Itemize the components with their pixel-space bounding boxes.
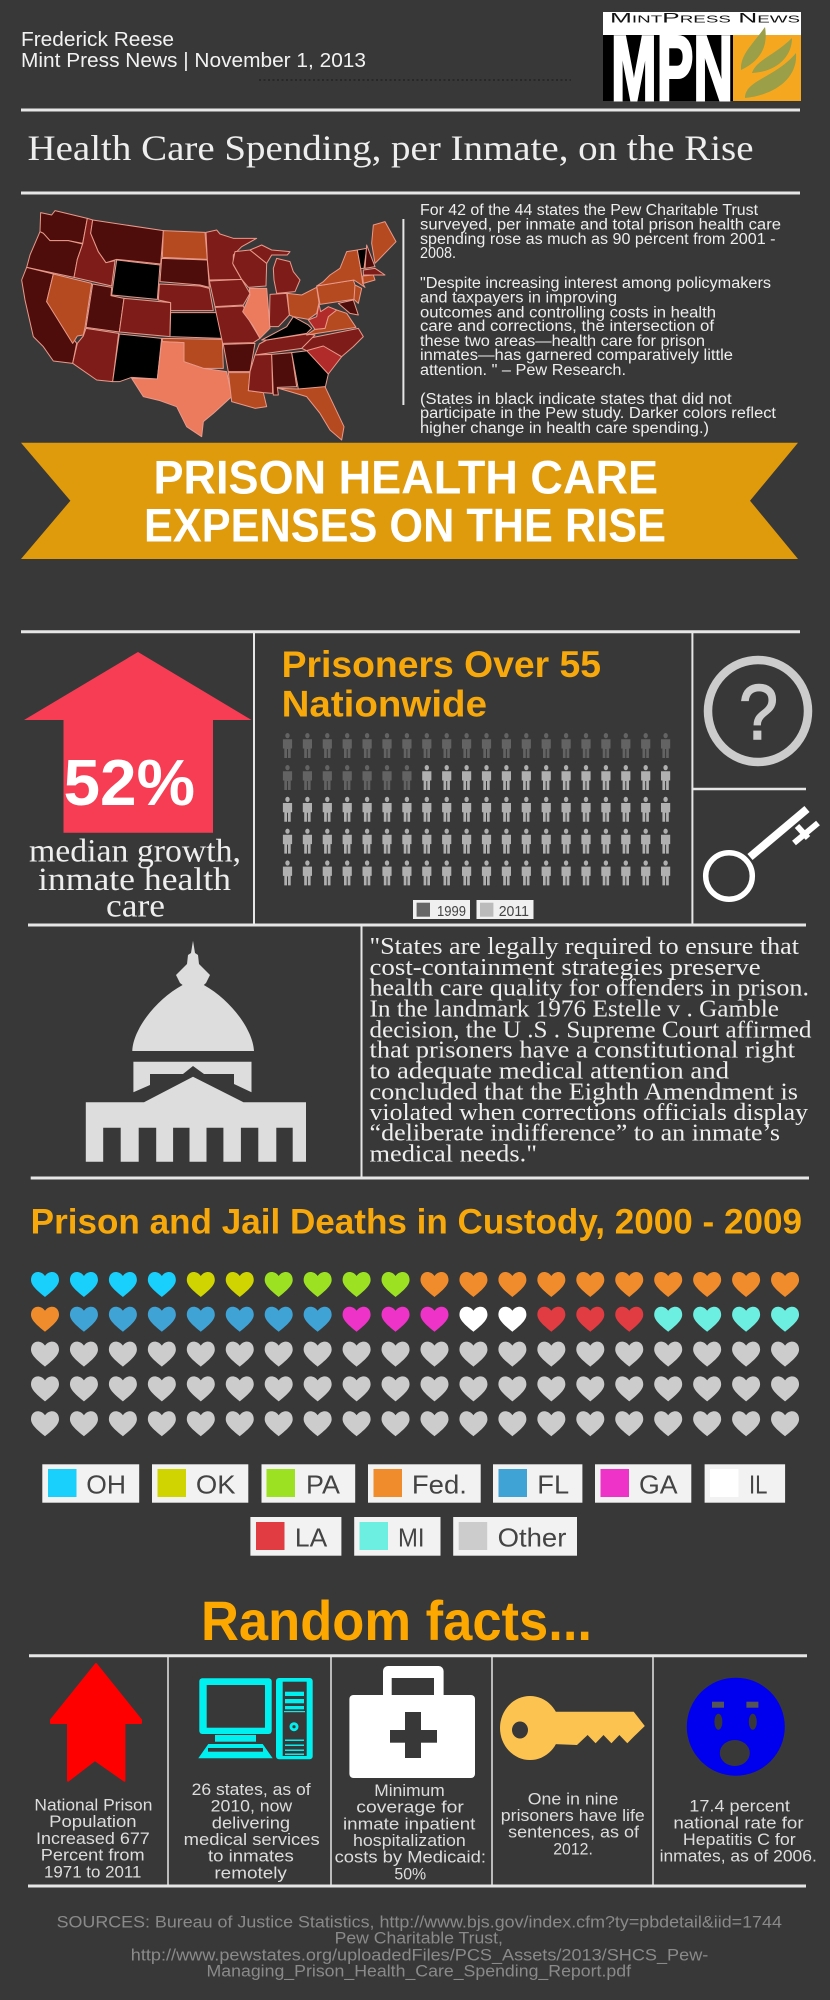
fact text: 2012. [553,1839,593,1858]
map explanation text: attention. " – Pew Research. [420,362,626,379]
panel: 52% median growth [24,652,252,925]
heading: deaths in custody: Prison and Jail Deaths in Custody, 2000 - 2009 [31,1202,802,1241]
map explanation text: care and corrections, the intersection of [420,318,715,335]
icon: blue shocked face [687,1678,785,1776]
caption: inmate health [38,862,232,898]
fact: prison population [34,1664,152,1881]
byline: Mint Press News | November 1, 2013 [21,50,366,72]
legend: states: Fed. [412,1469,467,1499]
icon: medical kit [349,1666,475,1778]
banner [21,443,798,559]
title: Health Care Spending, per Inmate, on the Rise [28,128,754,168]
fact: remote medical services [184,1678,320,1882]
map explanation text: participate in the Pew study. Darker colors reflect [420,405,777,422]
banner: PRISON HEALTH CARE [154,450,658,503]
legend: states: IL [749,1469,768,1499]
legend: states: OK [196,1469,236,1499]
fact: medicaid coverage [335,1666,486,1883]
sources [57,1913,782,1981]
quote: Estelle v. Gamble: "States are legally required to ensure that [370,933,799,960]
map explanation text: spending rose as much as 90 percent from 2001 - [420,231,776,248]
map explanation text: "Despite increasing interest among policymakers [420,275,771,292]
caption [29,834,241,925]
caption: median growth, [29,834,241,870]
map explanation text: For 42 of the 44 states the Pew Charitable Trust [420,202,759,219]
map explanation text: these two areas—health care for prison [420,333,705,350]
fact text: sentences, as of [508,1823,639,1842]
fact text [660,1797,817,1866]
legend: states: GA [639,1469,678,1499]
byline [21,29,366,72]
logo: MintPress News: MPN [611,18,733,120]
icon: gold key [500,1696,645,1760]
legend: states: LA [295,1523,328,1553]
pictogram chart: hearts [31,1272,799,1436]
legend: states: MI [398,1523,424,1553]
quote: Estelle v. Gamble: to adequate medical attention and [370,1058,729,1085]
quote: Estelle v. Gamble [370,933,812,1168]
quote: Estelle v. Gamble: medical needs." [370,1141,537,1168]
quote: Estelle v. Gamble: In the landmark 1976 Estelle v . Gamble [370,996,779,1023]
fact text: medical services [184,1830,320,1849]
legend: 1999 and 2011: 2011 [499,903,529,920]
quote: Estelle v. Gamble: concluded that the Eighth Amendment is [370,1078,798,1105]
heading: Nationwide [282,684,487,725]
caption: care [106,889,165,925]
icon: capitol building [86,941,306,1162]
legend: states [42,1464,785,1556]
fact text: delivering [212,1813,290,1832]
heading: random facts: Random facts... [201,1589,592,1652]
quote: Estelle v. Gamble: decision, the U .S . Supreme Court affirmed [370,1016,812,1043]
quote: Estelle v. Gamble: health care quality for offenders in prison. [370,975,809,1002]
fact text: inmate inpatient [343,1814,476,1833]
fact text: Population [49,1812,137,1831]
map explanation text: higher change in health care spending.) [420,420,709,437]
sources: SOURCES: Bureau of Justice Statistics, http://www.bjs.gov/index.cfm?ty=pbdetail&iid=1744 [57,1913,782,1931]
fact text: Minimum [374,1781,445,1800]
fact text: National Prison [34,1796,152,1815]
icon: red arrow [51,1664,141,1781]
map explanation text: (States in black indicate states that did not [420,391,732,408]
legend: 1999 and 2011: 1999 [437,903,466,920]
fact text [184,1780,320,1882]
legend: states: OH [86,1469,126,1499]
fact text: Percent from [41,1846,145,1865]
heading: Prisoners Over 55 [282,644,601,685]
legend: states: PA [306,1469,341,1499]
map explanation text: and taxpayers in improving [420,290,617,307]
sources: http://www.pewstates.org/uploadedFiles/PCS_Assets/2013/SHCS_Pew- [131,1947,708,1965]
fact text [34,1796,152,1881]
icon: computer [198,1678,313,1759]
heading [282,644,601,725]
icon: question mark circle [708,660,808,762]
map explanation text: outcomes and controlling costs in health [420,304,716,321]
stat: 52%: 52% [64,746,195,819]
map explanation text: inmates—has garnered comparatively little [420,347,733,364]
legend: states: Other [498,1523,567,1553]
sources: Managing_Prison_Health_Care_Spending_Report.pdf [206,1963,631,1981]
fact text: hospitalization [353,1831,466,1850]
sources: Pew Charitable Trust, [335,1929,503,1947]
logo: MintPress News: MintPress News [610,10,801,26]
icon: white key [706,809,818,899]
fact text: inmates, as of 2006. [660,1847,817,1866]
fact: life sentences [500,1696,645,1858]
quote: Estelle v. Gamble: cost-containment strategies preserve [370,954,761,981]
US map: spending change by state [22,211,396,440]
fact text: 1971 to 2011 [44,1862,141,1881]
fact text: 2010, now [211,1797,293,1816]
fact text: national rate for [673,1813,804,1832]
fact text: remotely [214,1863,287,1882]
map explanation text: surveyed, per inmate and total prison health care [420,216,781,233]
legend: 1999 and 2011 [413,900,534,920]
quote: Estelle v. Gamble: that prisoners have a constitutional right [370,1037,795,1064]
map explanation text [420,202,781,437]
map explanation text: 2008. [420,245,456,262]
fact text: 17.4 percent [689,1797,790,1816]
quote: Estelle v. Gamble: “deliberate indifference” to an inmate’s [370,1120,780,1147]
fact text: coverage for [356,1798,464,1817]
fact text: to inmates [208,1847,294,1866]
legend: states: FL [537,1469,569,1499]
banner: EXPENSES ON THE RISE [144,499,666,552]
panel: prisoners over 55 [282,644,670,920]
fact text: costs by Medicaid: [335,1848,486,1867]
fact text [501,1789,645,1858]
icon: red up arrow [24,652,252,833]
fact text: 26 states, as of [192,1780,311,1799]
fact text: 50% [394,1864,426,1883]
fact text: One in nine [528,1789,618,1808]
fact text [335,1781,486,1883]
fact: hepatitis C [660,1678,817,1866]
quote: Estelle v. Gamble: violated when corrections officials display [370,1099,809,1126]
fact text: Hepatitis C for [683,1830,796,1849]
fact text: Increased 677 [36,1829,150,1848]
byline: Frederick Reese [21,29,174,51]
fact text: prisoners have life [501,1806,645,1825]
pictogram chart: people [283,733,670,885]
icon: question mark circle: ? [739,668,778,756]
